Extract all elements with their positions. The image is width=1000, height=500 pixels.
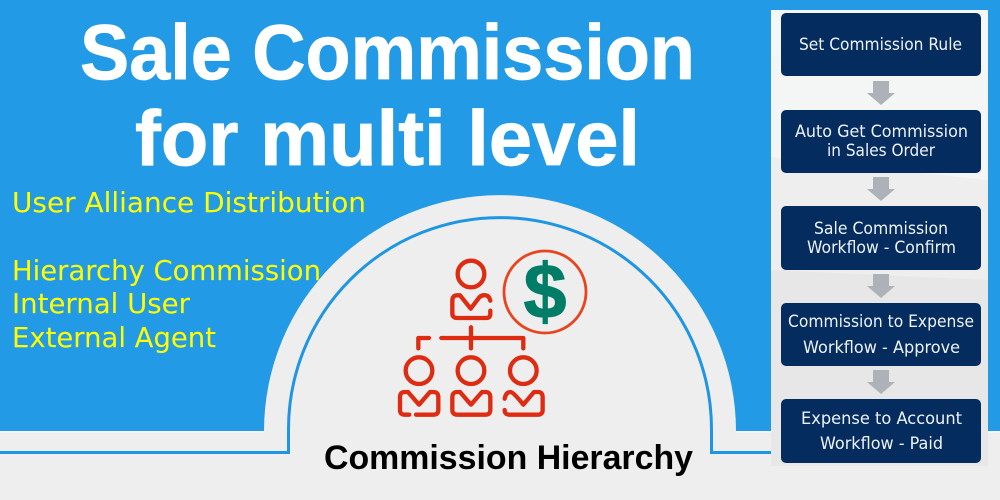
icon: dollar badge: $ bbox=[524, 249, 566, 335]
feature list: User Alliance Distribution bbox=[12, 187, 366, 219]
arrow 2 bbox=[867, 177, 895, 201]
caption: Commission Hierarchy bbox=[324, 439, 693, 477]
step 4: Commission to Expense bbox=[788, 312, 974, 331]
title: Sale Commission bbox=[80, 8, 695, 96]
arch: white dome with blue outline bbox=[0, 195, 772, 453]
step 2: in Sales Order bbox=[827, 141, 935, 160]
icon: dollar badge bbox=[504, 249, 586, 335]
icon: connector lines bbox=[418, 327, 523, 348]
step 2: Auto Get Commission bbox=[795, 122, 968, 141]
title bbox=[80, 8, 695, 182]
step 1: Set Commission Rule bbox=[799, 35, 962, 54]
step 5 bbox=[781, 399, 981, 463]
feature list: Internal User bbox=[12, 288, 191, 320]
step 1 bbox=[781, 13, 981, 76]
step 4: Workflow - Approve bbox=[803, 338, 960, 357]
arrow 1 bbox=[867, 81, 895, 105]
step 3: Sale Commission bbox=[814, 219, 948, 238]
feature list: External Agent bbox=[12, 322, 216, 354]
feature list: Hierarchy Commission bbox=[12, 255, 321, 287]
step 4 bbox=[781, 303, 981, 366]
panel: workflow bbox=[771, 10, 988, 466]
icon: left person bbox=[400, 357, 438, 415]
icon: right person bbox=[505, 357, 543, 415]
step 2 bbox=[781, 110, 981, 173]
icon: commission hierarchy bbox=[400, 261, 543, 415]
step 5: Expense to Account bbox=[801, 409, 963, 428]
title: for multi level bbox=[135, 94, 640, 182]
step 3: Workflow - Confirm bbox=[807, 238, 956, 257]
icon: top person bbox=[452, 261, 490, 318]
feature list bbox=[12, 187, 366, 354]
icon: middle person bbox=[452, 357, 490, 415]
step 5: Workflow - Paid bbox=[820, 434, 943, 453]
arrow 4 bbox=[867, 370, 895, 394]
arrow 3 bbox=[867, 274, 895, 298]
step 3 bbox=[781, 206, 981, 270]
